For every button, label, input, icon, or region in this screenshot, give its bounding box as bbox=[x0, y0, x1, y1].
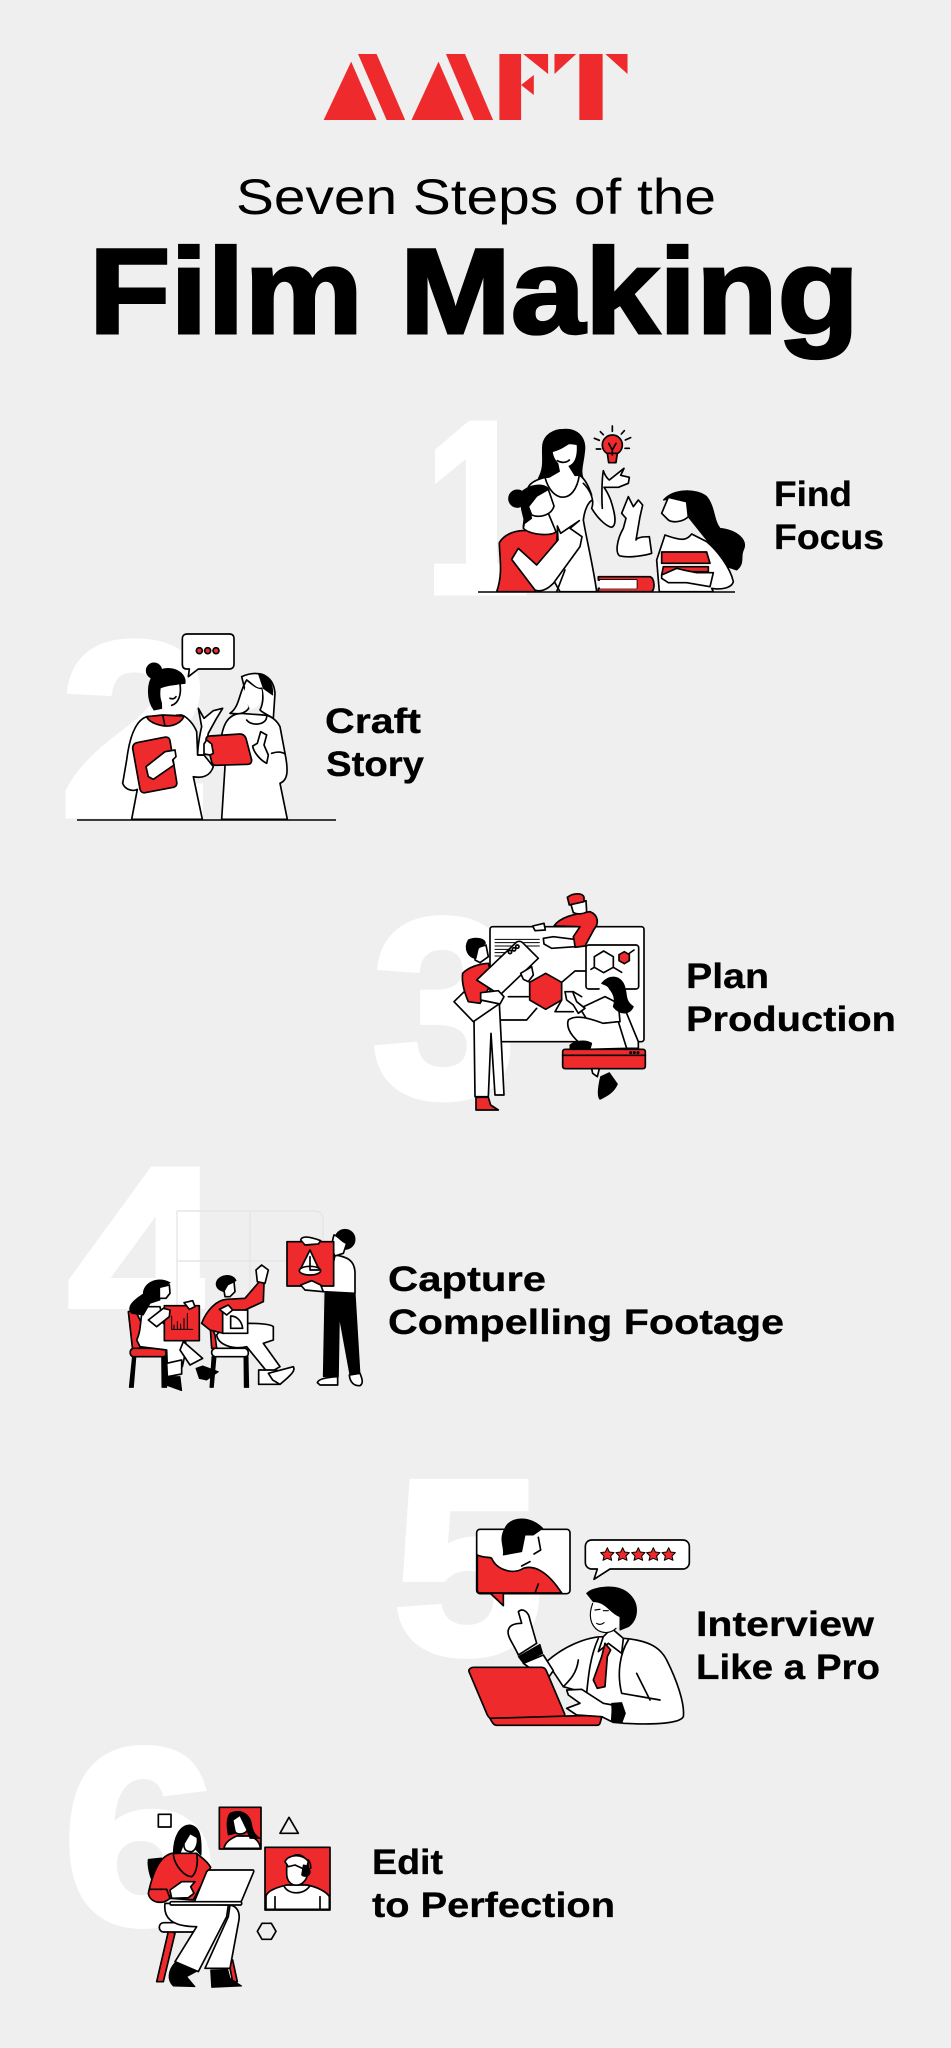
top man bbox=[554, 912, 597, 947]
illustration: woman editing with floating frames bbox=[148, 1807, 330, 1987]
trousers bbox=[165, 1903, 228, 1972]
red box bbox=[563, 1049, 645, 1069]
label: Interview Like a Pro: Like a Pro bbox=[696, 1648, 880, 1687]
sweater bbox=[148, 1853, 211, 1902]
ground line 1 bbox=[478, 591, 735, 593]
number 3: 3 bbox=[372, 866, 516, 1150]
faint grid panel bbox=[177, 1211, 323, 1310]
step 4: Capture Compelling Footage bbox=[60, 1116, 784, 1395]
portrait frame 1 bbox=[219, 1807, 261, 1849]
rating bubble bbox=[585, 1540, 689, 1579]
label: Find Focus: Find bbox=[774, 475, 852, 514]
pointing hand bbox=[508, 1610, 537, 1655]
seated woman bbox=[137, 1307, 187, 1367]
step 6: Edit to Perfection bbox=[63, 1697, 615, 1987]
laptop bbox=[195, 1870, 254, 1902]
seated woman left bbox=[497, 531, 557, 592]
number 4: 4 bbox=[68, 1116, 223, 1395]
book stack bbox=[598, 577, 654, 592]
illustration: three people with charts bbox=[128, 1229, 362, 1391]
number 2: 2 bbox=[60, 590, 210, 868]
label: Capture Compelling Footage bbox=[388, 1260, 784, 1342]
man bbox=[547, 1637, 684, 1724]
step 5: Interview Like a Pro bbox=[393, 1428, 880, 1725]
main heading: Film Making bbox=[89, 223, 859, 359]
laptop bbox=[469, 1667, 565, 1718]
number 1: 1 bbox=[425, 371, 529, 644]
label: Craft Story: Craft bbox=[325, 702, 421, 741]
illustration: team around planning board bbox=[454, 894, 645, 1110]
illustration: two women with tablets bbox=[123, 634, 287, 819]
label: Plan Production bbox=[686, 957, 896, 1039]
label: Capture Compelling Footage: Compelling Footage bbox=[388, 1303, 784, 1342]
floating shapes bbox=[158, 1814, 298, 1939]
subtitle line: Seven Steps of the bbox=[236, 169, 716, 225]
video box bbox=[477, 1519, 570, 1606]
molecule panel bbox=[586, 945, 639, 989]
right woman bbox=[222, 713, 287, 819]
number 5: 5 bbox=[393, 1428, 543, 1706]
standing man bbox=[323, 1292, 360, 1377]
logo: AAFT bbox=[324, 54, 628, 120]
step 2: Craft Story bbox=[60, 590, 425, 868]
red hexagon bbox=[530, 973, 562, 1009]
seated woman right bbox=[663, 491, 744, 570]
label: Plan Production: Plan bbox=[686, 957, 769, 996]
illustration: three women with bulb and books bbox=[497, 426, 744, 592]
ground line 2 bbox=[77, 819, 336, 821]
seated man bbox=[210, 1323, 217, 1348]
left man legs bbox=[474, 1003, 504, 1097]
label: Find Focus: Focus bbox=[774, 518, 884, 557]
chair bbox=[128, 1310, 142, 1350]
label: Find Focus bbox=[774, 475, 884, 557]
label: Plan Production: Production bbox=[686, 1000, 896, 1039]
label: Craft Story: Story bbox=[326, 745, 425, 784]
title bbox=[89, 169, 859, 359]
step 3: Plan Production bbox=[372, 866, 896, 1150]
label: Capture Compelling Footage: Capture bbox=[388, 1260, 546, 1299]
step 1: Find Focus bbox=[425, 371, 884, 644]
label: Interview Like a Pro: Interview bbox=[696, 1605, 875, 1644]
label: Edit to Perfection bbox=[372, 1843, 615, 1925]
illustration: video interview bbox=[469, 1519, 689, 1725]
number 6: 6 bbox=[63, 1697, 217, 1976]
label: Interview Like a Pro bbox=[696, 1605, 880, 1687]
label: Edit to Perfection: Edit bbox=[372, 1843, 443, 1882]
background masks behind figures bbox=[60, 1273, 300, 1360]
bulb bbox=[594, 426, 631, 463]
label: Craft Story bbox=[325, 702, 425, 784]
label: Edit to Perfection: to Perfection bbox=[372, 1886, 615, 1925]
portrait frame 2 bbox=[265, 1847, 330, 1910]
chair and stool bbox=[148, 1858, 162, 1880]
seated woman bbox=[617, 1003, 638, 1048]
